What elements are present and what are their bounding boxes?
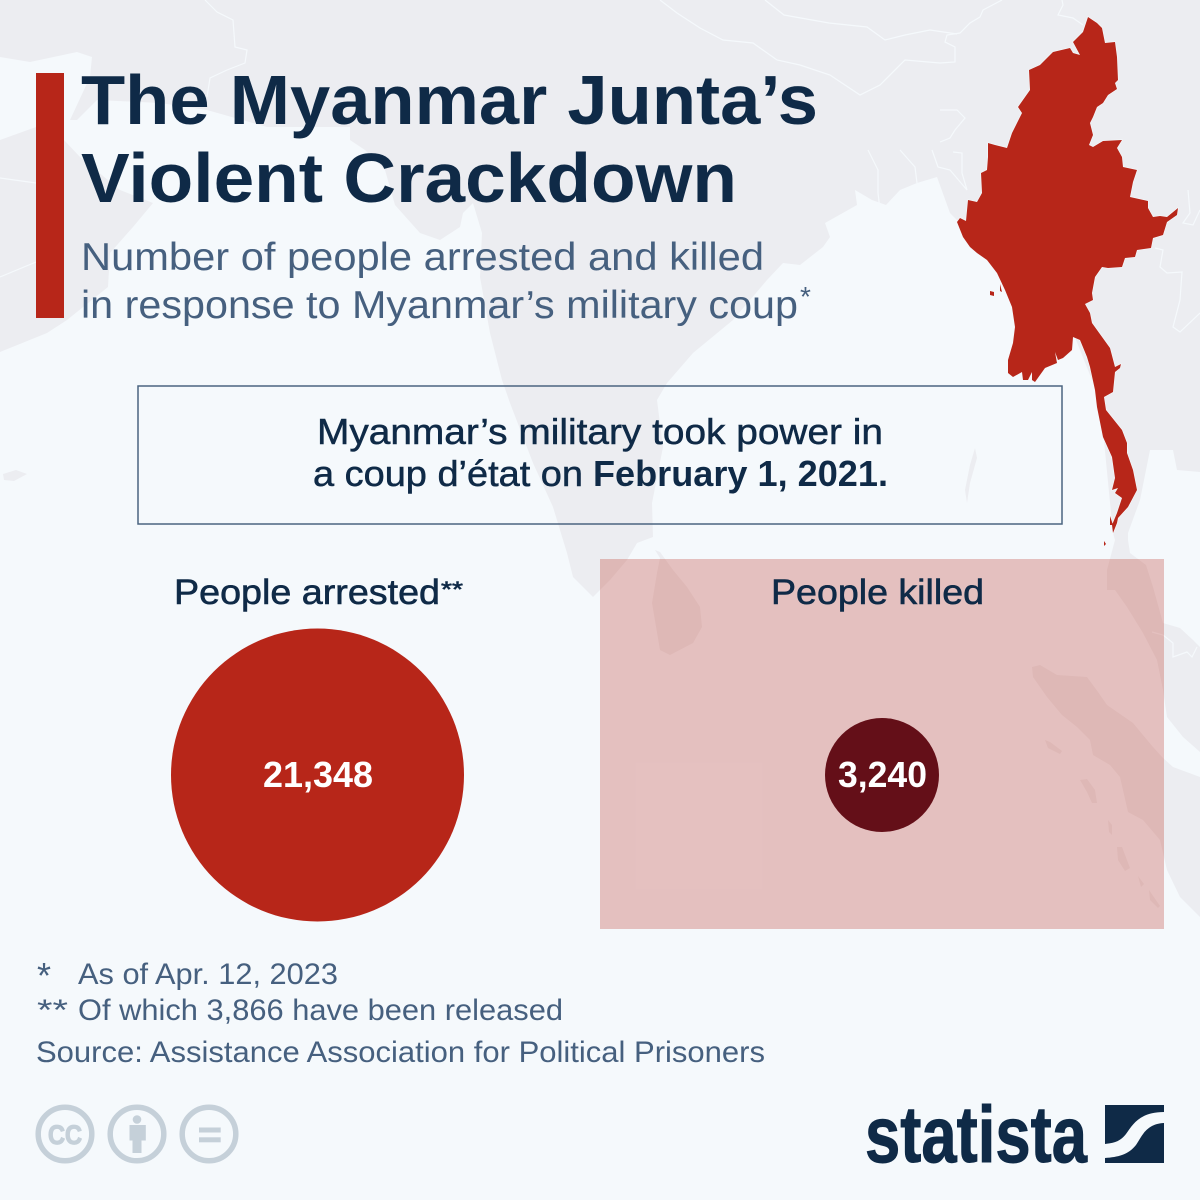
footnotes xyxy=(37,955,563,1027)
statista logo mark xyxy=(1105,1105,1164,1163)
callout: coup date: Myanmar’s military took power in xyxy=(317,411,883,452)
icon: creative commons: CC xyxy=(48,1120,82,1150)
footnotes: Of which 3,866 have been released xyxy=(78,994,563,1027)
bubble: people arrested: 21,348 xyxy=(263,754,373,795)
icon: no derivatives xyxy=(182,1107,236,1161)
footnotes: * xyxy=(37,955,51,996)
heading: people arrested: ** xyxy=(441,577,464,602)
bubble: people arrested xyxy=(171,628,464,922)
callout: coup date xyxy=(138,386,1062,524)
subtitle: in response to Myanmar’s military coup xyxy=(81,284,798,327)
statista wordmark: statista xyxy=(865,1090,1087,1179)
heading: people arrested: People arrested xyxy=(174,573,440,612)
bubble: people killed xyxy=(825,718,939,832)
subtitle xyxy=(81,236,811,327)
background map of South and Southeast Asia xyxy=(0,0,1200,917)
footnotes: ** xyxy=(37,994,68,1027)
bubble: people killed: 3,240 xyxy=(838,754,927,795)
icon: attribution xyxy=(110,1107,164,1161)
title: Violent Crackdown xyxy=(81,139,737,217)
panel: people killed background xyxy=(600,559,1164,929)
subtitle: * xyxy=(800,281,811,312)
footnotes: As of Apr. 12, 2023 xyxy=(78,958,338,991)
icon: creative commons xyxy=(38,1107,92,1161)
callout: coup date: February 1, 2021. xyxy=(593,453,888,494)
title accent bar xyxy=(36,73,64,318)
callout: coup date: a coup d’état on xyxy=(313,453,583,494)
map of Myanmar xyxy=(957,17,1178,546)
source: Source: Assistance Association for Political Prisoners xyxy=(36,1036,765,1069)
heading: people killed: People killed xyxy=(771,573,984,612)
title xyxy=(81,61,818,217)
title: The Myanmar Junta’s xyxy=(81,61,818,139)
subtitle: Number of people arrested and killed xyxy=(81,236,764,279)
